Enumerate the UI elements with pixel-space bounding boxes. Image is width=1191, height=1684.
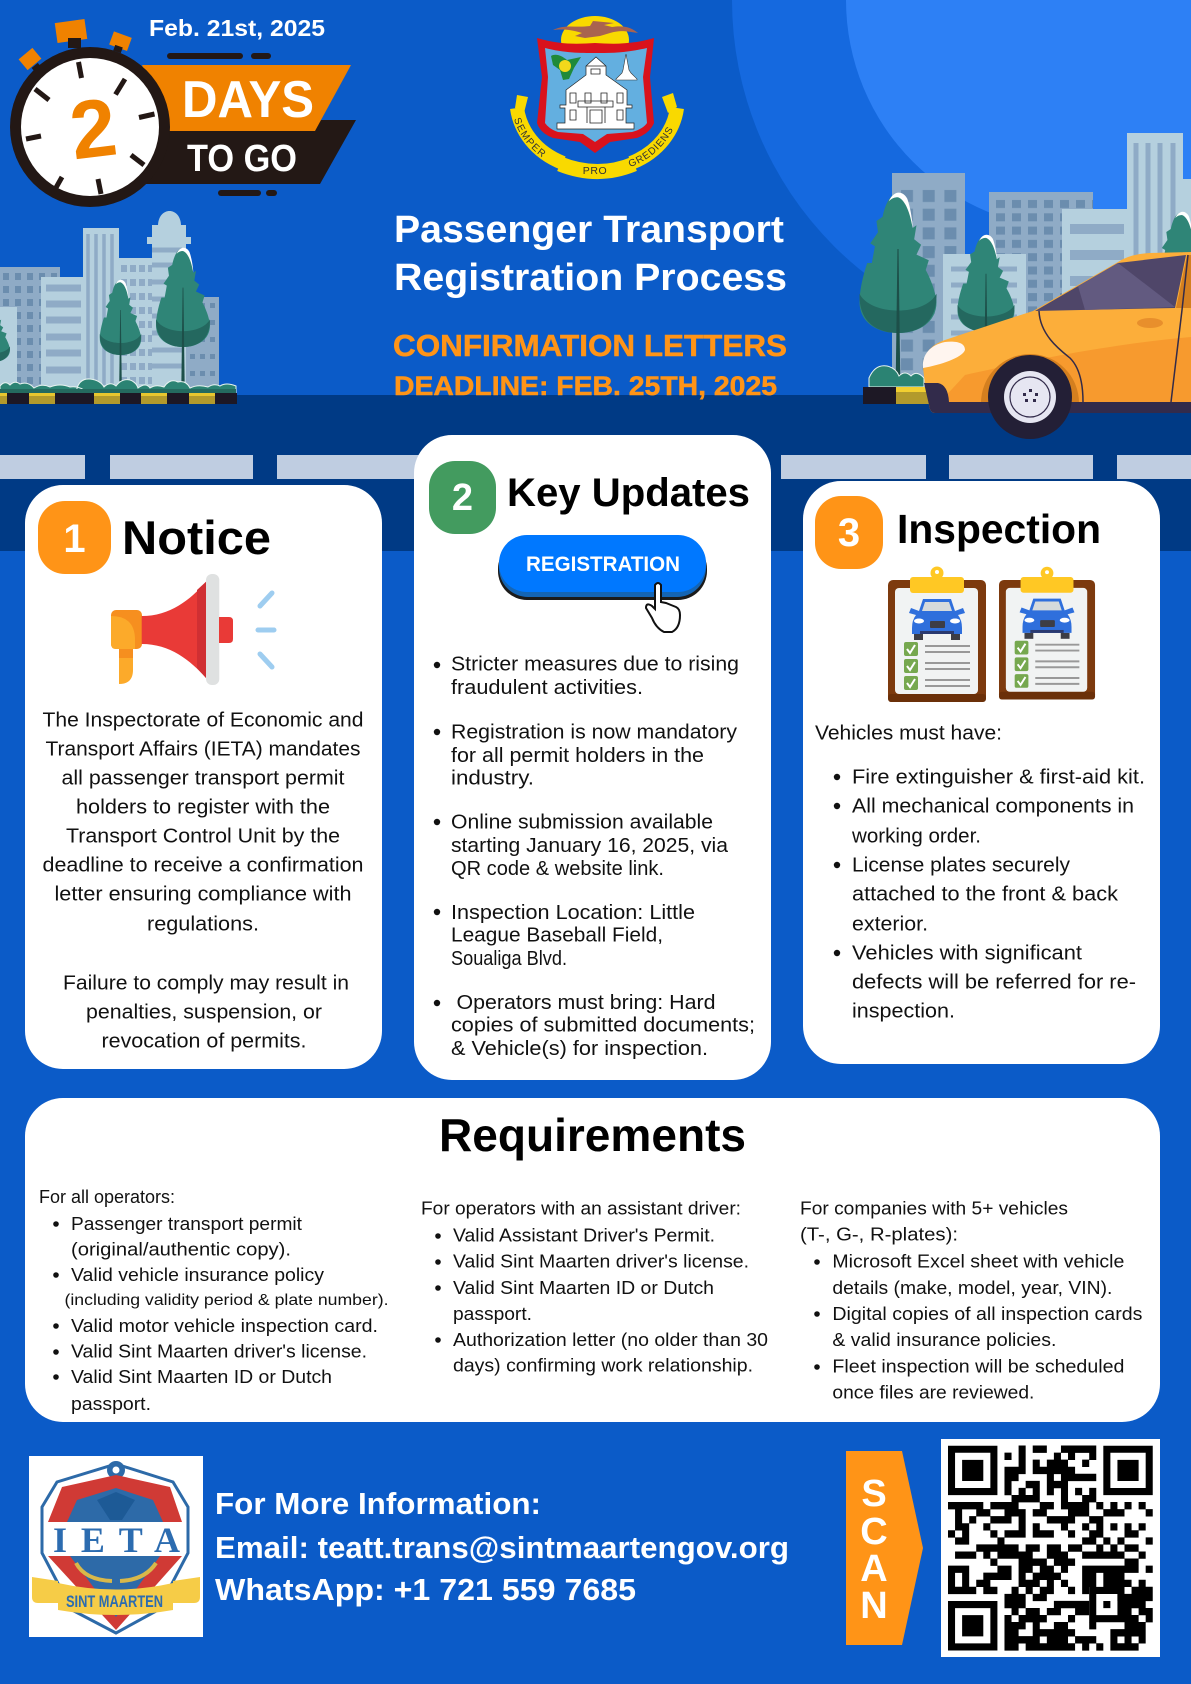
header decorative circles bbox=[732, 0, 1191, 348]
inspection bullet list: defects will be referred for re- bbox=[852, 971, 1136, 994]
right city skyline bbox=[859, 133, 1191, 404]
left city skyline bbox=[0, 211, 236, 395]
inspection bullet list bbox=[834, 766, 1145, 1023]
title: Passenger Transport bbox=[394, 209, 784, 251]
key updates bullet list: copies of submitted documents; bbox=[451, 1014, 755, 1037]
key updates bullet list: Inspection Location: Little bbox=[451, 901, 695, 924]
contact information: WhatsApp: +1 721 559 7685 bbox=[215, 1572, 636, 1607]
registration button bbox=[498, 535, 707, 632]
notice heading: Notice bbox=[122, 511, 271, 564]
requirements column: all operators bbox=[39, 1187, 388, 1414]
coat of arms: GREDIENS bbox=[628, 127, 672, 166]
countdown badge bbox=[10, 15, 356, 207]
subtitle: confirmation letters: CONFIRMATION LETTERS bbox=[393, 328, 787, 363]
inspection bullet list: attached to the front & back bbox=[852, 883, 1119, 906]
panel: key updates bbox=[414, 435, 771, 1080]
key updates bullet list: & Vehicle(s) for inspection. bbox=[451, 1037, 708, 1060]
scan arrow bbox=[846, 1451, 923, 1645]
clock number: 2 bbox=[65, 82, 121, 177]
notice body text: Transport Affairs (IETA) mandates bbox=[46, 738, 360, 761]
clock face bbox=[10, 47, 170, 207]
contact information bbox=[215, 1486, 789, 1607]
taxi car bbox=[923, 252, 1191, 439]
requirements column: assistant driver: Valid Sint Maarten ID or Dutch bbox=[453, 1278, 714, 1298]
scan arrow: C bbox=[860, 1511, 888, 1553]
title: Registration Process bbox=[394, 257, 787, 299]
clock knobs bbox=[19, 19, 132, 72]
contact information: For More Information: bbox=[215, 1486, 541, 1521]
notice body text: Transport Control Unit by the bbox=[66, 825, 340, 848]
requirements column: companies: once files are reviewed. bbox=[832, 1382, 1034, 1402]
inspection bullet list: All mechanical components in bbox=[852, 794, 1134, 818]
notice body text: letter ensuring compliance with bbox=[54, 883, 352, 906]
requirements column: companies: For companies with 5+ vehicles bbox=[800, 1199, 1068, 1219]
notice number badge: 1 bbox=[63, 517, 86, 561]
QR code bbox=[941, 1439, 1160, 1657]
key updates bullet list: QR code & website link. bbox=[451, 857, 664, 880]
requirements column: companies: details (make, model, year, VIN). bbox=[832, 1278, 1112, 1298]
requirements column: all operators: Passenger transport permit bbox=[71, 1214, 302, 1234]
requirements column: assistant driver bbox=[421, 1199, 768, 1376]
key updates number badge bbox=[429, 461, 496, 534]
contact information: Email: teatt.trans@sintmaartengov.org bbox=[215, 1530, 789, 1565]
inspection bullet list: Fire extinguisher & first-aid kit. bbox=[852, 766, 1145, 788]
requirements column: assistant driver: passport. bbox=[453, 1304, 532, 1324]
inspection number badge bbox=[815, 496, 883, 569]
requirements column: companies bbox=[800, 1199, 1142, 1402]
wheel bbox=[988, 355, 1072, 439]
key updates bullet list: industry. bbox=[451, 767, 534, 790]
IETA logo: IETA bbox=[53, 1520, 180, 1560]
key updates bullet list: Stricter measures due to rising bbox=[451, 653, 739, 676]
notice body text: The Inspectorate of Economic and bbox=[42, 709, 364, 732]
requirements column: companies: & valid insurance policies. bbox=[832, 1330, 1056, 1350]
notice number badge bbox=[38, 501, 111, 574]
notice body text: deadline to receive a confirmation bbox=[42, 854, 364, 877]
scan arrow: A bbox=[860, 1548, 888, 1590]
requirements column: assistant driver: Authorization letter (no older than 30 bbox=[453, 1330, 768, 1350]
subtitle: deadline: DEADLINE: FEB. 25TH, 2025 bbox=[394, 371, 777, 401]
panel: notice bbox=[25, 485, 382, 1069]
key updates bullet list: for all permit holders in the bbox=[451, 744, 704, 767]
panel: inspection bbox=[803, 481, 1160, 1064]
inspection heading: Inspection bbox=[897, 506, 1101, 552]
notice body text: penalties, suspension, or bbox=[86, 1001, 322, 1024]
requirements column: all operators: Valid Sint Maarten driver's license. bbox=[71, 1342, 367, 1362]
requirements column: assistant driver: days) confirming work relationship. bbox=[453, 1356, 753, 1376]
requirements column: companies: Microsoft Excel sheet with vehicle bbox=[832, 1251, 1124, 1271]
key updates bullet list: Soualiga Blvd. bbox=[451, 947, 567, 970]
icon: checklist clipboards bbox=[888, 566, 1095, 702]
road bbox=[0, 395, 1191, 551]
notice body text: Failure to comply may result in bbox=[63, 972, 349, 995]
requirements column: all operators: For all operators: bbox=[39, 1187, 175, 1207]
requirements column: all operators: Valid Sint Maarten ID or Dutch bbox=[71, 1367, 332, 1387]
IETA logo bbox=[29, 1456, 203, 1637]
coat of arms bbox=[510, 16, 684, 180]
notice body text: revocation of permits. bbox=[102, 1030, 306, 1053]
key updates bullet list: Operators must bring: Hard bbox=[456, 991, 716, 1014]
coat of arms: SEMPER bbox=[514, 118, 546, 158]
key updates bullet list bbox=[434, 653, 755, 1060]
notice body text: all passenger transport permit bbox=[62, 767, 345, 790]
key updates bullet list: Online submission available bbox=[451, 811, 713, 834]
icon: megaphone bbox=[111, 574, 274, 685]
coat of arms: PRO bbox=[583, 165, 607, 177]
requirements column: all operators: Valid motor vehicle inspection card. bbox=[71, 1316, 378, 1336]
requirements column: companies: (T-, G-, R-plates): bbox=[800, 1224, 958, 1244]
requirements column: assistant driver: Valid Sint Maarten driver's license. bbox=[453, 1251, 749, 1271]
requirements column: all operators: (including validity period & plate number). bbox=[64, 1292, 388, 1309]
key updates bullet list: Registration is now mandatory bbox=[451, 720, 738, 743]
left curb bbox=[0, 393, 237, 404]
key updates heading: Key Updates bbox=[507, 471, 750, 515]
requirements heading: Requirements bbox=[439, 1109, 746, 1161]
key updates bullet list: League Baseball Field, bbox=[451, 923, 663, 946]
scan arrow: N bbox=[860, 1585, 888, 1627]
requirements column: all operators: (original/authentic copy). bbox=[71, 1240, 291, 1260]
inspection bullet list: inspection. bbox=[852, 1000, 955, 1023]
notice body text bbox=[42, 709, 364, 1053]
icon: hand cursor bbox=[646, 583, 680, 632]
title bbox=[394, 209, 787, 299]
vehicles intro: Vehicles must have: bbox=[815, 722, 1002, 744]
ribbon black bbox=[143, 120, 356, 184]
IETA logo: SINT MAARTEN bbox=[66, 1592, 163, 1611]
inspection number badge: 3 bbox=[838, 511, 860, 555]
days label: DAYS bbox=[182, 71, 314, 129]
date: Feb. 21st, 2025 bbox=[149, 15, 325, 41]
requirements column: all operators: Valid vehicle insurance policy bbox=[71, 1265, 324, 1285]
notice body text: regulations. bbox=[147, 913, 259, 936]
requirements column: all operators: passport. bbox=[71, 1394, 151, 1414]
inspection bullet list: License plates securely bbox=[852, 854, 1071, 877]
key updates number badge: 2 bbox=[452, 477, 473, 519]
key updates bullet list: fraudulent activities. bbox=[451, 676, 643, 699]
requirements column: companies: Digital copies of all inspection cards bbox=[832, 1304, 1142, 1324]
requirements column: assistant driver: Valid Assistant Driver's Permit. bbox=[453, 1226, 715, 1246]
inspection bullet list: working order. bbox=[851, 825, 981, 848]
registration button: REGISTRATION bbox=[526, 553, 680, 576]
inspection bullet list: Vehicles with significant bbox=[852, 942, 1082, 965]
notice body text: holders to register with the bbox=[76, 796, 330, 819]
scan arrow: S bbox=[861, 1473, 887, 1515]
key updates bullet list: starting January 16, 2025, via bbox=[451, 834, 729, 857]
requirements column: assistant driver: For operators with an assistant driver: bbox=[421, 1199, 741, 1219]
ribbon orange bbox=[142, 65, 351, 131]
inspection bullet list: exterior. bbox=[852, 913, 928, 936]
requirements column: companies: Fleet inspection will be scheduled bbox=[832, 1357, 1124, 1377]
to go label: TO GO bbox=[187, 138, 297, 180]
panel: requirements bbox=[25, 1098, 1160, 1422]
